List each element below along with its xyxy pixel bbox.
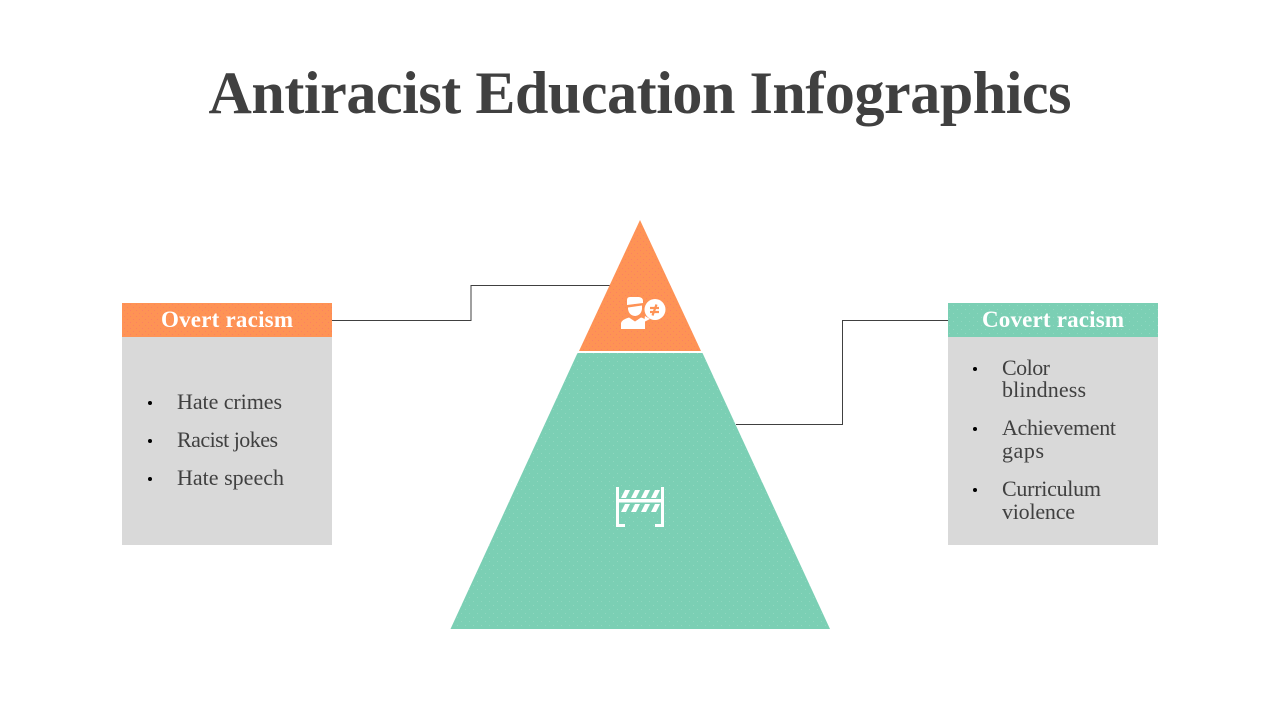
bullet list: covert racism: Color [1002, 355, 1051, 380]
bullet list: covert racism: Achievement [1002, 415, 1116, 440]
pyramid bottom: green tier [450, 353, 830, 629]
bullet list: covert racism: blindness [1002, 377, 1086, 402]
panel header [948, 303, 1158, 337]
panel body [948, 337, 1158, 545]
panel body [122, 337, 332, 545]
connector: overt racism to pyramid top [332, 286, 612, 320]
bullet list: covert racism [973, 355, 1116, 524]
bullet list: overt racism: Hate crimes [177, 389, 282, 414]
heading: covert racism: Covert racism [982, 307, 1124, 332]
icon: road barrier [616, 487, 664, 527]
bullet list: overt racism [148, 389, 284, 490]
icon: person with not-equal speech bubble [621, 297, 666, 329]
bullet list: covert racism: gaps [1002, 438, 1044, 463]
panel header [122, 303, 332, 337]
title: Antiracist Education Infographics [208, 60, 1072, 126]
panel: overt racism [122, 303, 332, 545]
bullet list: covert racism: violence [1002, 499, 1075, 524]
connector: covert racism to pyramid base [736, 320, 948, 424]
bullet list: overt racism: Racist jokes [177, 427, 278, 452]
panel: covert racism [948, 303, 1158, 545]
pyramid top: orange tier [579, 220, 701, 351]
heading: overt racism: Overt racism [161, 307, 293, 332]
pyramid [450, 220, 830, 629]
bullet list: overt racism: Hate speech [177, 465, 284, 490]
bullet list: covert racism: Curriculum [1002, 476, 1101, 501]
